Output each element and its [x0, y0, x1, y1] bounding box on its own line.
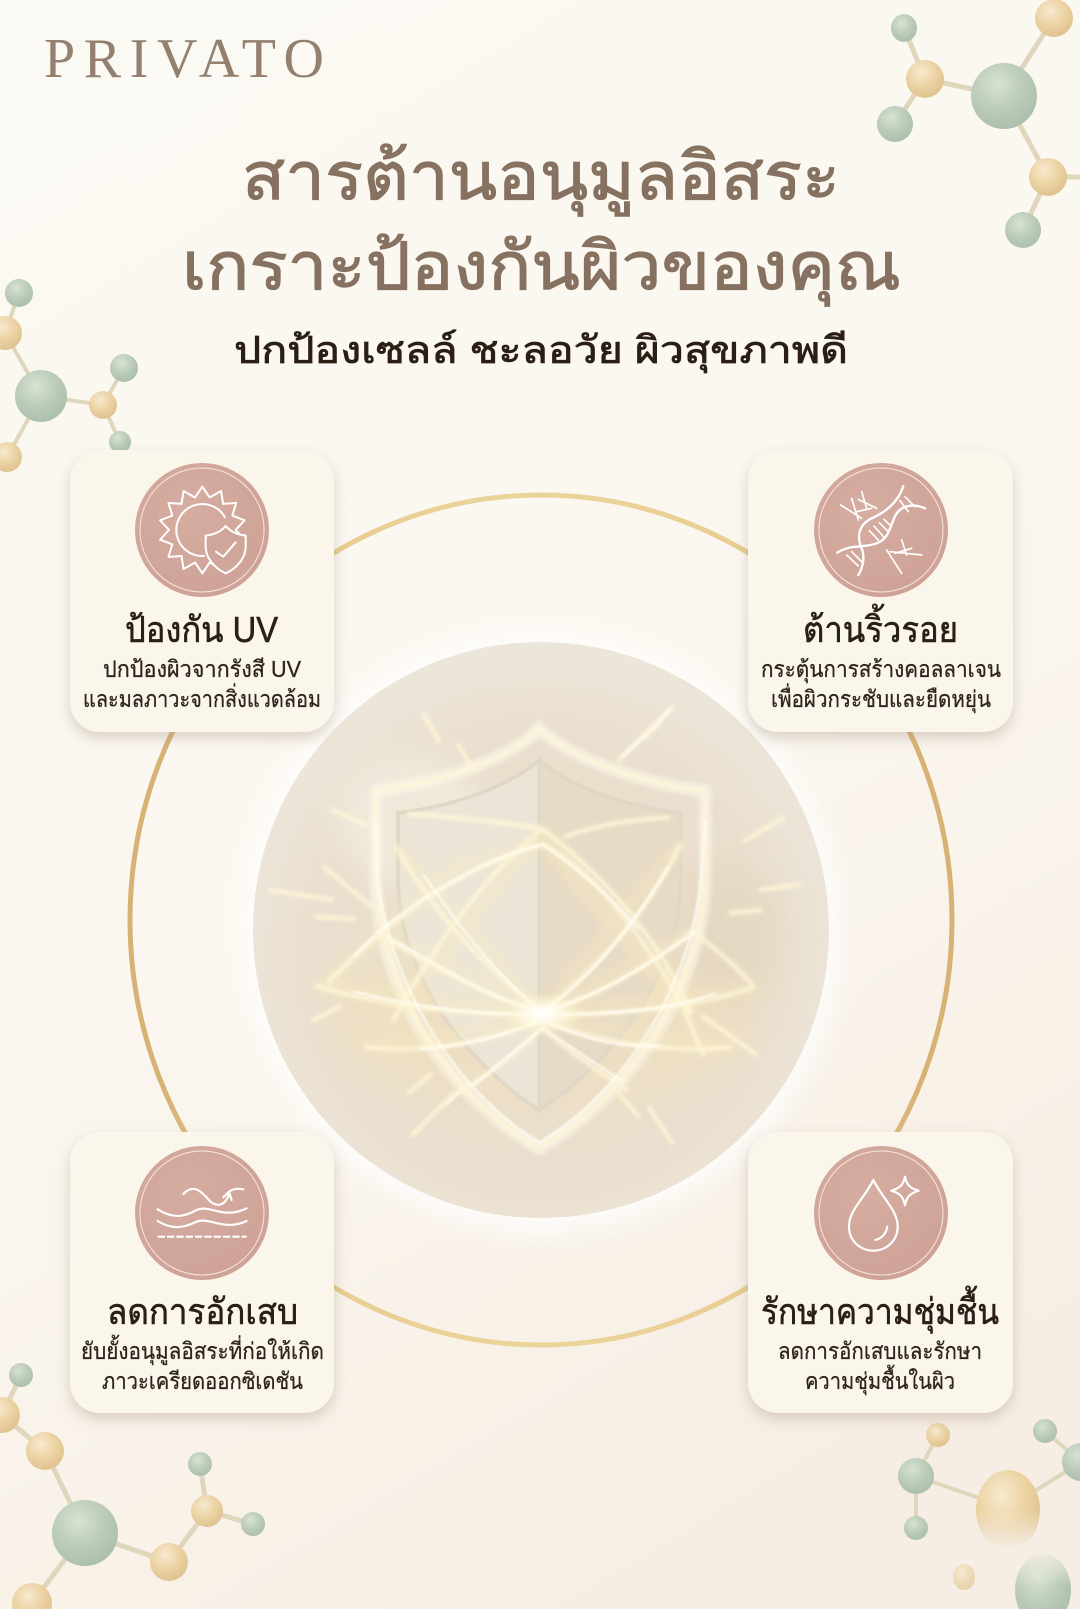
description: กระตุ้นการสร้างคอลลาเจน: [761, 656, 1001, 683]
description: [83, 656, 321, 712]
card: moisture: [748, 1132, 1013, 1413]
icon: waves: [135, 1146, 269, 1280]
gold ring: [130, 495, 952, 1345]
title: สารต้านอนุมูลอิสระ: [242, 139, 840, 217]
card: reduce inflammation: [70, 1132, 334, 1413]
light rays: [271, 707, 799, 1149]
icon: sun with shield: [135, 463, 269, 597]
central sphere with shield: [245, 636, 837, 1228]
heading: ลดการอักเสบ: [107, 1291, 298, 1332]
card: anti wrinkle: [748, 450, 1013, 732]
description: ภาวะเครียดออกซิเดชัน: [102, 1368, 303, 1394]
subtitle: ปกป้องเซลล์ ชะลอวัย ผิวสุขภาพดี: [234, 329, 848, 373]
description: ลดการอักเสบและรักษา: [778, 1338, 982, 1364]
description: และมลภาวะจากสิ่งแวดล้อม: [83, 683, 321, 712]
title: [182, 139, 901, 307]
description: ความชุ่มชื้นในผิว: [805, 1365, 955, 1395]
title: เกราะป้องกันผิวของคุณ: [182, 229, 901, 307]
molecule: mid left: [0, 279, 138, 472]
description: ปกป้องผิวจากรังสี UV: [103, 656, 302, 682]
molecule: top right: [877, 0, 1080, 248]
heading: ต้านริ้วรอย: [803, 603, 958, 650]
icon: water drop: [814, 1146, 948, 1280]
card: UV protection: [70, 450, 334, 732]
description: [761, 656, 1001, 713]
molecule: bottom right: [898, 1419, 1080, 1609]
description: ยับยั้งอนุมูลอิสระที่ก่อให้เกิด: [81, 1335, 324, 1365]
shield: [328, 729, 783, 1149]
icon: DNA: [814, 463, 948, 597]
description: [81, 1335, 324, 1394]
heading: ป้องกัน UV: [125, 609, 278, 650]
description: [778, 1338, 982, 1395]
logo: PRIVATO: PRIVATO: [44, 28, 324, 90]
molecule: bottom left: [0, 1363, 265, 1609]
heading: รักษาความชุ่มชื้น: [761, 1285, 999, 1334]
description: เพื่อผิวกระชับและยืดหยุ่น: [771, 683, 991, 713]
